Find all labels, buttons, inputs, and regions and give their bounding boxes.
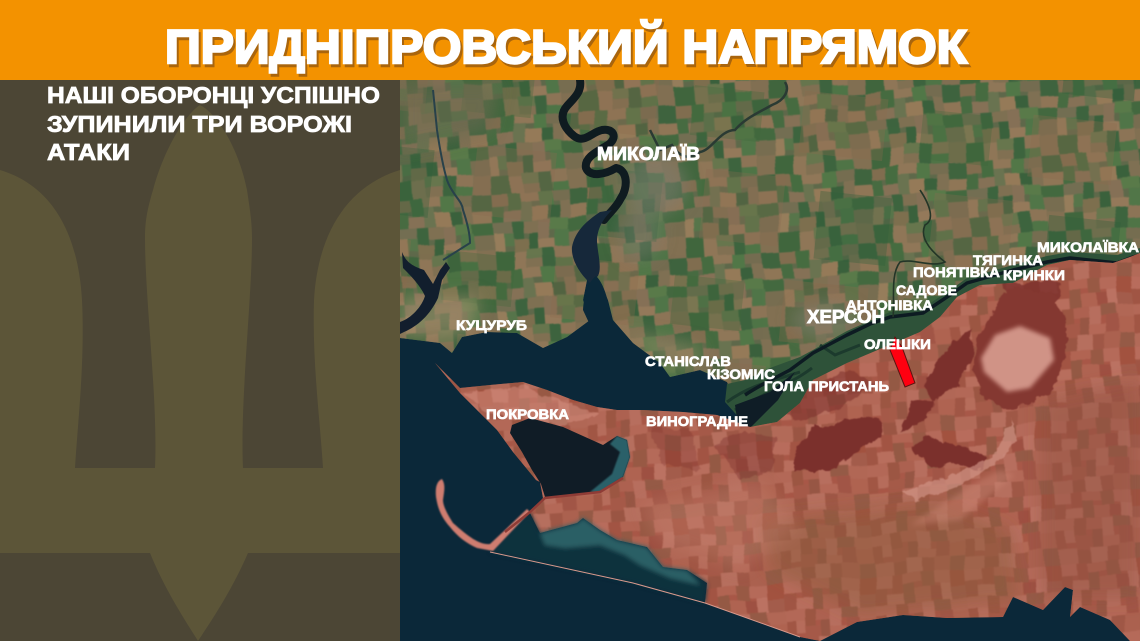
Southern Bug river <box>563 80 626 220</box>
label: Mykolaiv: МИКОЛАЇВ <box>597 144 700 164</box>
place labels <box>456 144 1139 429</box>
sea <box>400 80 1140 641</box>
pale steppe streak <box>916 470 1010 524</box>
label: Kizomys: КІЗОМИС <box>707 366 775 382</box>
label: Mykolaivka: МИКОЛАЇВКА <box>1037 239 1139 255</box>
sand ring <box>972 288 1066 410</box>
pale steppe west of the bay <box>649 484 792 565</box>
northern tributary <box>893 190 945 317</box>
Dzharylhach lagoon <box>510 418 630 497</box>
Bug liman <box>583 276 613 325</box>
Tendra spit <box>436 479 530 551</box>
summary text <box>47 82 380 165</box>
title: ПРИДНІПРОВСЬКИЙ НАПРЯМОК <box>165 20 967 73</box>
label: Sadove: САДОВЕ <box>896 282 957 298</box>
summary text: НАШІ ОБОРОНЦІ УСПІШНО <box>47 82 380 108</box>
satellite map <box>390 70 1140 641</box>
Berezan estuary <box>400 252 450 334</box>
land north of the Dnipro <box>400 80 1140 384</box>
title shadow: ПРИДНІПРОВСЬКИЙ НАПРЯМОК <box>167 23 969 76</box>
label: Krynky: КРИНКИ <box>1003 267 1065 283</box>
label: Kutsurub: КУЦУРУБ <box>456 317 527 333</box>
neck shoreline <box>505 478 623 532</box>
left panel <box>0 80 400 641</box>
label: Hola Prystan: ГОЛА ПРИСТАНЬ <box>764 378 889 394</box>
red arrow: enemy attack direction <box>890 337 915 387</box>
label: Stanislav: СТАНІСЛАВ <box>645 353 731 369</box>
delta channels <box>727 345 860 410</box>
label: Oleshky: ОЛЕШКИ <box>864 336 931 352</box>
grey urban and steppe tones <box>400 85 859 370</box>
bay barrier coast <box>490 552 800 637</box>
Dnipro delta floodplain <box>725 248 1140 430</box>
olive-toned southern fields <box>760 380 1140 615</box>
trident emblem watermark <box>0 105 400 641</box>
Inhul side channel <box>650 82 787 157</box>
occupied territory overlay <box>425 240 1140 641</box>
label: Vynohradne: ВИНОГРАДНЕ <box>646 413 748 429</box>
Yahorlyk bay shallows <box>490 513 707 603</box>
Oleshky sands <box>981 326 1054 392</box>
label: Kherson: ХЕРСОН <box>807 307 885 327</box>
Dnipro river <box>745 255 1140 395</box>
label: Pokrovka: ПОКРОВКА <box>486 406 569 422</box>
pale sand strip <box>903 420 1015 500</box>
delta mouth water <box>735 372 795 428</box>
western stream <box>433 90 470 260</box>
lagoon teal shallows <box>590 436 630 492</box>
dark forest patches <box>650 283 1060 480</box>
northern spit sands <box>465 386 600 425</box>
label: Antonivka: АНТОНІВКА <box>846 297 933 313</box>
summary text: ЗУПИНИЛИ ТРИ ВОРОЖІ <box>47 111 352 137</box>
summary text: АТАКИ <box>47 139 130 165</box>
header band <box>0 0 1140 80</box>
label: Ponyativka: ПОНЯТІВКА <box>913 264 1000 280</box>
label: Tiahynka: ТЯГИНКА <box>973 252 1043 268</box>
Bug estuary <box>572 210 612 283</box>
